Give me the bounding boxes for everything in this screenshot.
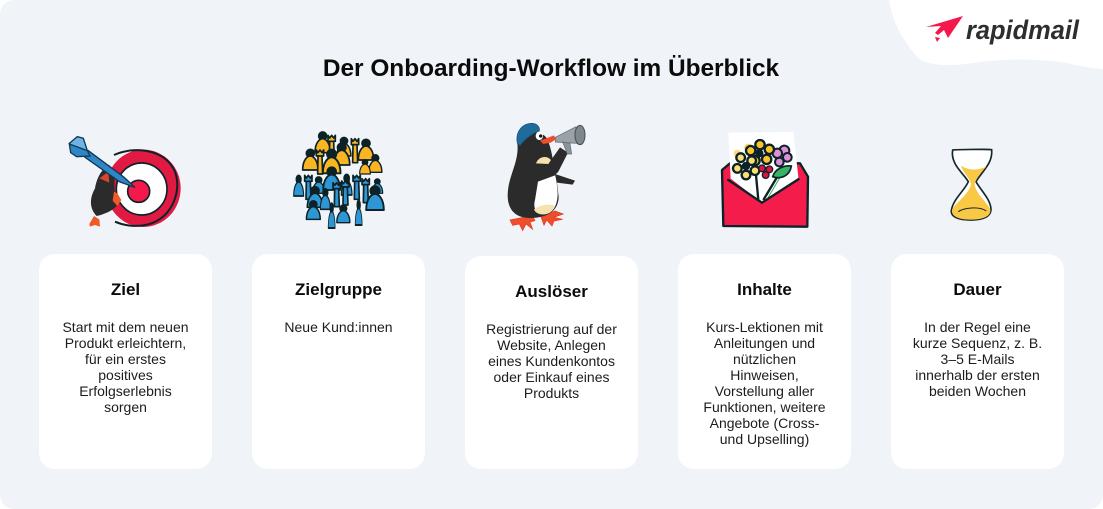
text: Dauer: In der Regel eine xyxy=(924,319,1031,335)
text: Inhalte: Vorstellung aller xyxy=(715,383,814,399)
card: Auslöser xyxy=(465,256,638,469)
text: Inhalte: Hinweisen, xyxy=(730,367,799,383)
heading: Zielgruppe: Zielgruppe xyxy=(295,280,382,299)
icon: envelope with flowers xyxy=(720,132,810,228)
card: Dauer xyxy=(891,254,1064,469)
text: Auslöser: Registrierung auf der xyxy=(486,321,617,337)
title: Der Onboarding-Workflow im Überblick xyxy=(323,55,779,82)
text: Ziel: Erfolgserlebnis xyxy=(79,383,172,399)
text: Dauer xyxy=(913,319,1042,399)
text: Dauer: 3–5 E-Mails xyxy=(941,351,1014,367)
icon: crowd of people xyxy=(293,131,385,229)
text: Ziel: für ein erstes xyxy=(85,351,166,367)
text: Dauer: innerhalb der ersten xyxy=(915,367,1040,383)
icon: penguin with dart and target xyxy=(68,136,181,227)
text: Dauer: kurze Sequenz, z. B. xyxy=(913,335,1042,351)
text: Auslöser: oder Einkauf eines xyxy=(494,369,609,385)
card: Zielgruppe xyxy=(252,254,425,469)
icon: hourglass xyxy=(950,148,993,221)
icon: penguin with megaphone xyxy=(508,123,586,232)
text: Inhalte: Kurs-Lektionen mit xyxy=(706,319,823,335)
text: Ziel: positives xyxy=(98,367,153,383)
text: Inhalte: Anleitungen und xyxy=(714,335,815,351)
text: Dauer: beiden Wochen xyxy=(929,383,1026,399)
logo area: white blob with rapidmail logo: rapidmail xyxy=(966,15,1080,45)
text: Auslöser xyxy=(486,321,617,401)
heading: Inhalte: Inhalte xyxy=(737,280,792,299)
text: Inhalte: und Upselling) xyxy=(720,431,809,447)
text: Inhalte xyxy=(703,319,826,447)
text: Auslöser: eines Kundenkontos xyxy=(488,353,615,369)
card: Ziel xyxy=(39,254,212,469)
text: Zielgruppe: Neue Kund:innen xyxy=(284,319,393,335)
heading: Dauer: Dauer xyxy=(953,280,1002,299)
text: Inhalte: Funktionen, weitere xyxy=(703,399,826,415)
card: Inhalte xyxy=(678,254,851,469)
text: Auslöser: Website, Anlegen xyxy=(497,337,606,353)
text: Ziel: Produkt erleichtern, xyxy=(65,335,186,351)
text: Ziel: Start mit dem neuen xyxy=(62,319,189,335)
text: Ziel: sorgen xyxy=(104,399,147,415)
text: Inhalte: Angebote (Cross- xyxy=(710,415,819,431)
heading: Ziel: Ziel xyxy=(111,280,140,299)
heading: Auslöser: Auslöser xyxy=(515,282,588,301)
text: Ziel xyxy=(62,319,189,415)
logo area: white blob with rapidmail logo xyxy=(889,0,1103,69)
text: Auslöser: Produkts xyxy=(524,385,579,401)
text: Inhalte: nützlichen xyxy=(733,351,796,367)
